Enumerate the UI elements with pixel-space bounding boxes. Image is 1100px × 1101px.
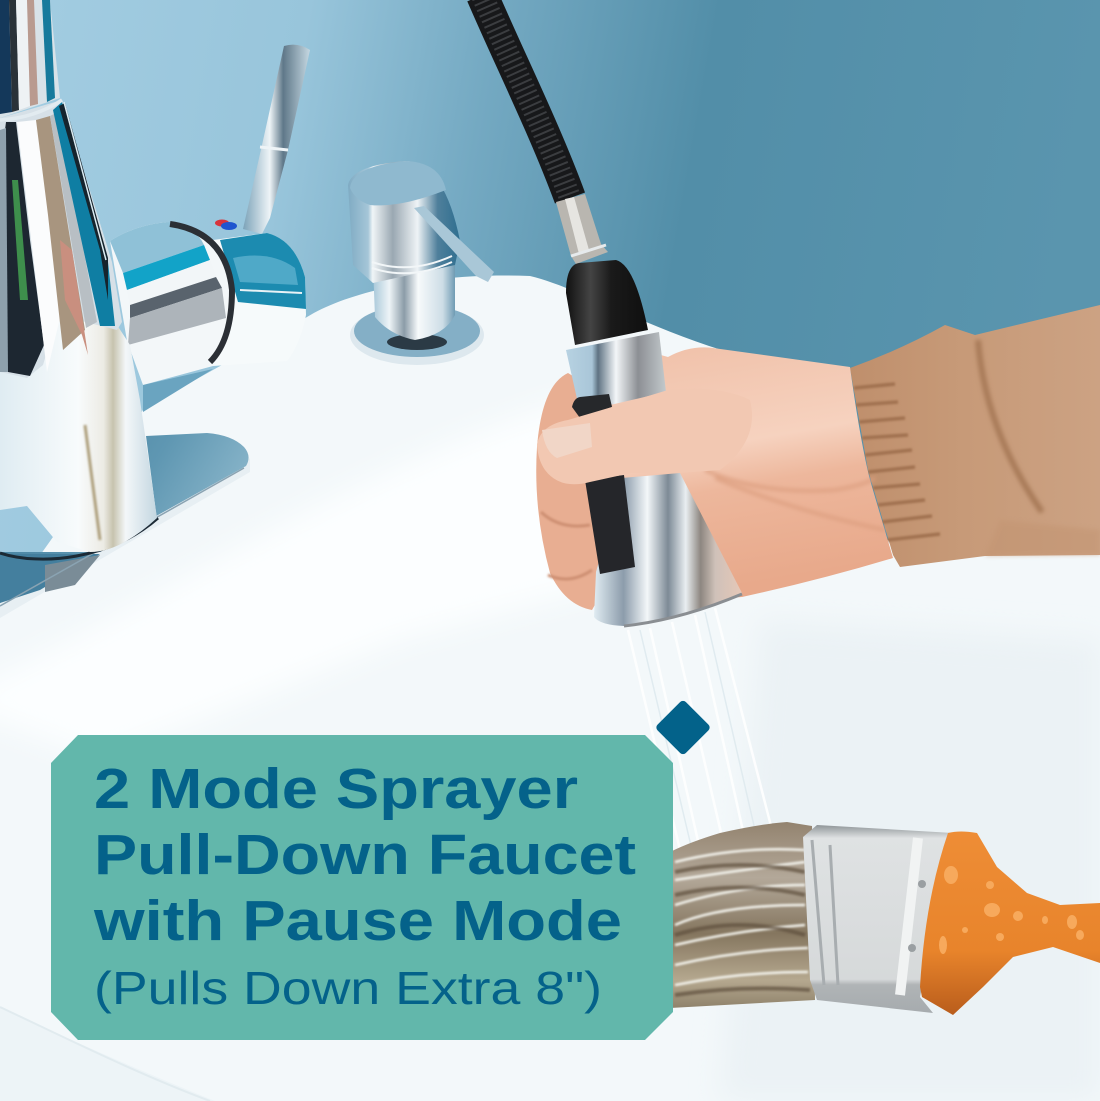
water spray <box>628 608 772 850</box>
soap dispenser <box>348 161 494 365</box>
dispenser base <box>350 305 484 365</box>
blue wall background <box>0 0 1100 620</box>
braided black hose <box>482 0 570 198</box>
caption heading: Pull-Down Faucet <box>94 823 636 887</box>
gripping fingers <box>536 373 620 610</box>
orange handle <box>920 832 1100 1015</box>
caption heading <box>93 757 636 953</box>
lower chrome nozzle <box>594 473 742 626</box>
metal ferrule <box>803 825 953 1013</box>
caption heading: with Pause Mode <box>93 889 622 953</box>
lower white base <box>0 313 157 552</box>
upper cone chrome stripes <box>0 100 122 378</box>
faucet deck plate <box>0 433 250 618</box>
caption subtitle: (Pulls Down Extra 8") <box>94 962 602 1014</box>
bristles <box>670 822 815 1008</box>
dispenser lever <box>414 206 494 282</box>
upper chrome sleeve <box>566 332 666 412</box>
sweater sleeve <box>850 305 1100 567</box>
metal hose collar <box>556 194 608 264</box>
sprayer mode marker diamond <box>655 699 711 756</box>
handle rear cap <box>213 233 306 366</box>
icon: handle lever <box>243 45 310 234</box>
hand gripping sprayer <box>536 347 893 610</box>
faucet body <box>0 0 157 552</box>
dispenser body <box>373 262 455 340</box>
dispenser cap <box>348 161 460 283</box>
chrome sprayer head <box>566 260 742 626</box>
faucet handle assembly <box>110 45 310 412</box>
palm and back of hand <box>600 347 893 600</box>
paint brush <box>670 822 1100 1015</box>
red and blue temperature dot <box>215 220 237 230</box>
black trigger upper <box>572 394 612 418</box>
black sprayer neck <box>566 260 648 345</box>
handle cylinder <box>110 222 233 385</box>
black trigger lower <box>585 475 635 574</box>
thumbnail <box>542 423 592 458</box>
reflection under handle <box>143 369 213 412</box>
caption heading: 2 Mode Sprayer <box>94 757 578 821</box>
water droplets <box>939 866 1084 954</box>
caption panel <box>51 735 673 1040</box>
white sink basin <box>0 275 1100 1101</box>
thumb <box>537 389 752 484</box>
upper spout stripes <box>0 0 60 118</box>
collar ring <box>0 100 62 120</box>
